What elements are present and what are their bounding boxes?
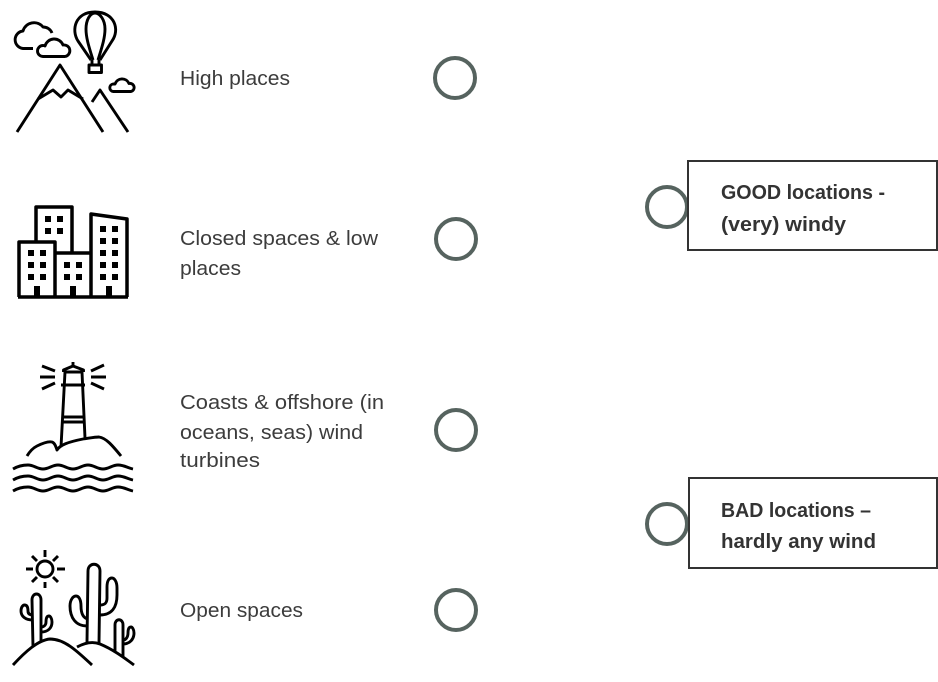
label: coasts and offshore: oceans, seas) wind	[180, 422, 363, 444]
label: bad locations	[721, 500, 876, 553]
label: open spaces: Open spaces	[180, 600, 303, 622]
label: closed spaces and low places	[180, 228, 379, 280]
label: good locations: (very) windy	[721, 214, 847, 236]
label: coasts and offshore: Coasts & offshore (in	[180, 392, 384, 414]
icon: lighthouse on a rock with waves	[13, 362, 133, 491]
label: coasts and offshore	[180, 392, 384, 472]
label: coasts and offshore: turbines	[180, 450, 260, 472]
icon: mountains, balloon and clouds	[15, 12, 134, 132]
label: high places: High places	[180, 68, 290, 90]
icon: city buildings	[18, 207, 128, 297]
label: good locations	[721, 182, 885, 236]
label: closed spaces and low places: places	[180, 258, 241, 280]
label: bad locations: BAD locations –	[721, 500, 871, 522]
option circle: closed spaces	[436, 219, 476, 259]
option circle: open spaces	[436, 590, 476, 630]
box: bad locations	[689, 478, 937, 568]
target circle: bad locations	[647, 504, 687, 544]
label: closed spaces and low places: Closed spaces & low	[180, 228, 379, 250]
category: bad locations	[647, 478, 937, 568]
option circle: high places	[435, 58, 475, 98]
label: bad locations: hardly any wind	[721, 531, 876, 553]
category: good locations	[647, 161, 937, 250]
option circle: coasts	[436, 410, 476, 450]
label: good locations: GOOD locations -	[721, 182, 885, 204]
icon: desert with sun and cacti	[13, 550, 134, 665]
box: good locations	[688, 161, 937, 250]
target circle: good locations	[647, 187, 687, 227]
